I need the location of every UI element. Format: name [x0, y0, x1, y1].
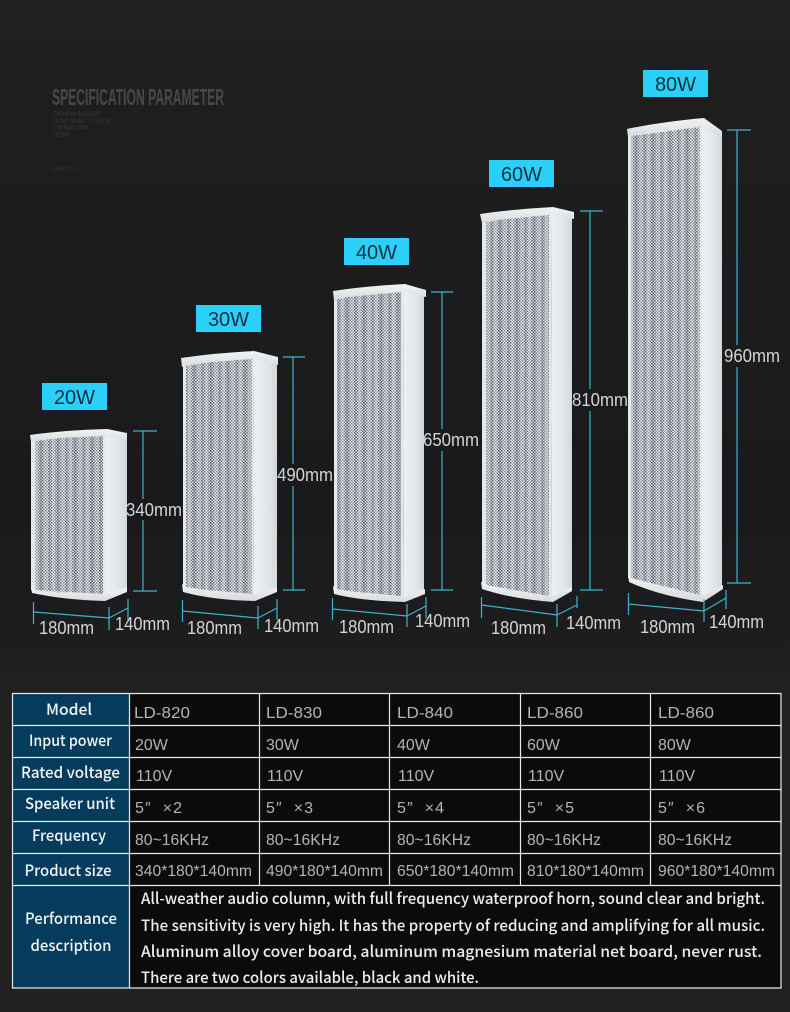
width and depth dimension: 140mm	[115, 614, 170, 634]
speaker body 60W	[480, 207, 574, 602]
product: 60W speaker	[480, 160, 628, 638]
power badge 20W: 20W	[54, 387, 95, 409]
height dimension 960mm	[724, 130, 780, 583]
speaker body 30W	[181, 351, 278, 601]
height dimension 960mm: 960mm	[724, 346, 780, 366]
height dimension 340mm: 340mm	[126, 500, 182, 520]
row labels: Frequency	[32, 824, 107, 846]
performance description text: The sensitivity is very high. It has the property of reducing and amplifying for all music.	[141, 914, 765, 936]
row: frequency: 80~16KHz	[266, 832, 340, 849]
small caption lines: OUND MUSIC SYSTEM	[53, 119, 110, 125]
row: frequency: 80~16KHz	[397, 832, 471, 849]
row: speaker unit: 5″ ×3	[266, 800, 313, 817]
row labels	[21, 698, 120, 956]
width and depth dimension: 180mm	[187, 618, 242, 638]
power badge 80W: 80W	[655, 74, 696, 96]
row: input power: 60W	[527, 737, 561, 754]
row: speaker unit: 5″ ×5	[527, 800, 574, 817]
row: frequency	[135, 832, 732, 849]
height dimension 340mm	[126, 431, 182, 591]
row: speaker unit	[135, 800, 705, 817]
row: frequency: 80~16KHz	[527, 832, 601, 849]
width and depth dimension	[34, 599, 170, 638]
speaker body 80W	[627, 118, 723, 602]
row: input power: 30W	[266, 737, 300, 754]
row labels: Performance	[25, 907, 117, 929]
row labels: Model	[46, 698, 92, 720]
row: speaker unit: 5″ ×2	[135, 800, 182, 817]
width and depth dimension: 180mm	[39, 618, 94, 638]
row labels: Rated voltage	[21, 761, 120, 783]
row: product size: 650*180*140mm	[397, 863, 514, 880]
small caption lines: QUALITY	[53, 167, 76, 173]
height dimension 490mm: 490mm	[277, 465, 333, 485]
power badge 30W	[196, 305, 261, 332]
product: 80W speaker	[627, 70, 780, 637]
row: model: LD-830	[266, 705, 322, 722]
height dimension 810mm	[572, 211, 628, 590]
performance description text	[141, 887, 765, 988]
row: product size: 340*180*140mm	[135, 863, 252, 880]
performance description text: There are two colors available, black and white.	[141, 966, 479, 988]
heading: specification parameter: SPECIFICATION PARAMETER	[52, 84, 224, 110]
row: model: LD-860	[658, 705, 714, 722]
row: model: LD-860	[527, 705, 583, 722]
row: rated voltage: 110V	[528, 768, 565, 785]
width and depth dimension: 140mm	[264, 616, 319, 636]
row: rated voltage: 110V	[136, 768, 173, 785]
table value cells	[130, 693, 781, 885]
row labels: Input power	[29, 729, 113, 751]
row: product size: 490*180*140mm	[266, 863, 383, 880]
power badge 40W	[344, 238, 409, 265]
table header column	[12, 693, 130, 988]
height dimension 490mm	[277, 357, 333, 590]
performance description text: Aluminum alloy cover board, aluminum magnesium material net board, never rust.	[141, 940, 762, 962]
small caption lines	[53, 112, 110, 173]
table grid	[12, 694, 781, 988]
row: model: LD-820	[134, 705, 190, 722]
small caption lines: FASHION BACKGR	[53, 112, 101, 118]
height dimension 810mm: 810mm	[572, 390, 628, 410]
speaker body 20W	[30, 429, 127, 601]
product: 40W speaker	[332, 238, 479, 637]
specification table	[12, 693, 781, 988]
row: rated voltage: 110V	[398, 768, 435, 785]
width and depth dimension	[332, 597, 470, 637]
row: input power: 40W	[397, 737, 431, 754]
width and depth dimension	[628, 590, 764, 637]
row labels: Product size	[24, 859, 112, 881]
width and depth dimension: 140mm	[415, 611, 470, 631]
row: product size: 960*180*140mm	[658, 863, 775, 880]
width and depth dimension: 180mm	[640, 617, 695, 637]
row: frequency: 80~16KHz	[135, 832, 209, 849]
width and depth dimension	[482, 596, 621, 638]
row: rated voltage: 110V	[267, 768, 304, 785]
power badge 60W	[489, 160, 554, 187]
power badge 30W: 30W	[208, 309, 249, 331]
width and depth dimension: 180mm	[339, 617, 394, 637]
width and depth dimension	[182, 599, 319, 638]
small caption lines: STEREO AMP	[53, 126, 88, 132]
width and depth dimension: 140mm	[709, 612, 764, 632]
title block	[52, 84, 224, 173]
description cell	[130, 885, 781, 988]
height dimension 650mm	[423, 292, 479, 590]
row: input power: 80W	[658, 737, 692, 754]
row: product size: 810*180*140mm	[527, 863, 644, 880]
row: rated voltage: 110V	[659, 768, 696, 785]
power badge 60W: 60W	[501, 164, 542, 186]
power badge 40W: 40W	[356, 242, 397, 264]
power badge 80W	[643, 70, 708, 97]
speaker body 40W	[333, 284, 426, 602]
width and depth dimension: 180mm	[491, 618, 546, 638]
row: product size	[135, 863, 775, 880]
small caption lines: LIFIER	[53, 133, 70, 139]
row: frequency: 80~16KHz	[658, 832, 732, 849]
row labels: description	[30, 934, 112, 956]
row: model: LD-840	[397, 705, 453, 722]
product: 30W speaker	[181, 305, 333, 638]
height dimension 650mm: 650mm	[423, 430, 479, 450]
width and depth dimension: 140mm	[566, 613, 621, 633]
row: input power: 20W	[135, 737, 169, 754]
product: 20W speaker	[30, 383, 182, 638]
row labels: Speaker unit	[25, 792, 115, 814]
row: model	[134, 705, 714, 722]
row: input power	[135, 737, 692, 754]
row: rated voltage	[136, 768, 696, 785]
power badge 20W	[42, 383, 107, 410]
performance description text: All-weather audio column, with full frequency waterproof horn, sound clear and bright.	[141, 887, 765, 909]
row: speaker unit: 5″ ×4	[397, 800, 444, 817]
row: speaker unit: 5″ ×6	[658, 800, 705, 817]
